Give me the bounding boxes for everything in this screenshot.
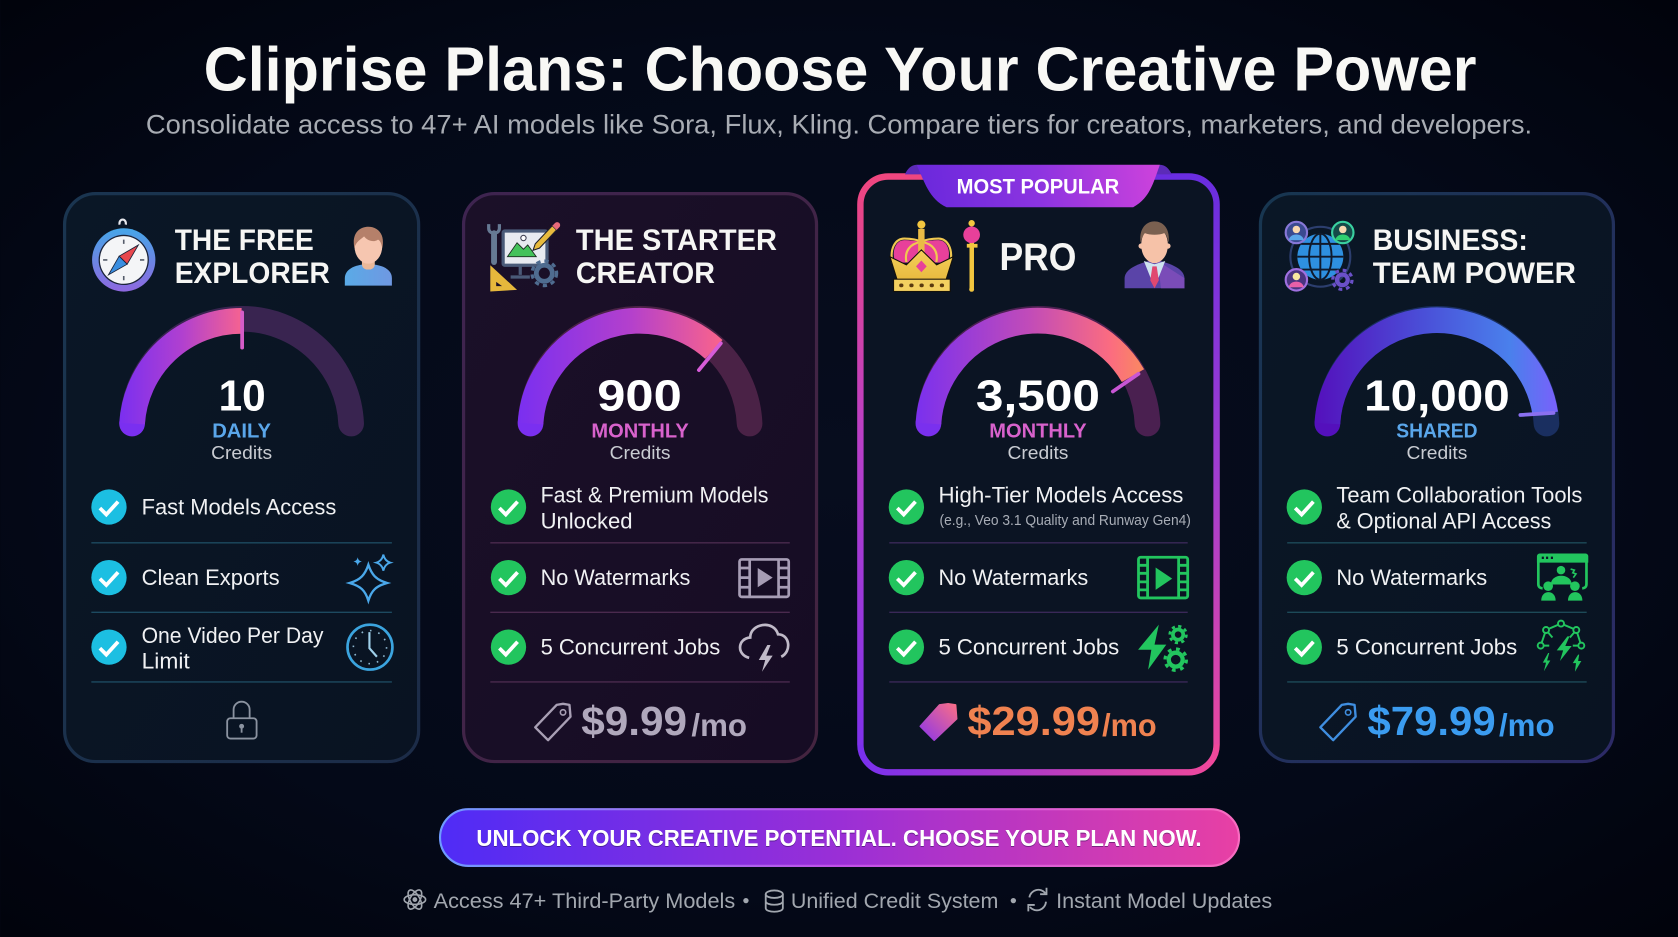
feature: no watermarks xyxy=(1287,560,1487,595)
feature: team collaboration: & Optional API Access xyxy=(1336,508,1551,533)
price: 79.99: /mo xyxy=(1499,708,1555,743)
gauge: 10 daily credits: Credits xyxy=(211,442,272,463)
feature: clean exports: Clean Exports xyxy=(142,565,280,590)
feature: concurrent jobs: 5 Concurrent Jobs xyxy=(938,635,1119,660)
plan name xyxy=(175,224,330,290)
price: 9.99: /mo xyxy=(691,708,747,743)
feature: concurrent jobs xyxy=(491,629,720,665)
feature: concurrent jobs: 5 Concurrent Jobs xyxy=(541,635,720,660)
title: Cliprise Plans: Choose Your Creative Power xyxy=(204,35,1477,104)
icon: green film strip xyxy=(1138,557,1188,598)
icon: sparkles xyxy=(350,555,390,601)
icon: lock xyxy=(227,702,257,739)
gauge: 900 monthly credits: 900 xyxy=(597,372,682,421)
call to action button: UNLOCK YOUR CREATIVE POTENTIAL. CHOOSE YOUR PLAN NOW. xyxy=(476,826,1202,852)
feature: high-tier models: High-Tier Models Access xyxy=(938,483,1183,508)
badge: most popular: MOST POPULAR xyxy=(957,176,1119,199)
icon: crown and scepter xyxy=(890,220,980,292)
feature: no watermarks xyxy=(491,560,690,595)
feature: one video per day limit xyxy=(91,623,323,674)
icon: database xyxy=(766,890,783,912)
badge: most popular xyxy=(905,165,1172,207)
plan name xyxy=(1373,224,1576,290)
panel: pro xyxy=(860,165,1217,772)
plan name xyxy=(576,224,777,290)
icon: film strip xyxy=(740,559,789,597)
panel: free explorer xyxy=(65,194,419,762)
gauge: 10 daily credits: 10 xyxy=(219,372,266,421)
icon: person in suit xyxy=(1125,221,1184,288)
panel: business xyxy=(1260,194,1613,762)
feature: no watermarks xyxy=(889,560,1088,595)
plan name: TEAM POWER xyxy=(1373,257,1576,290)
gauge: 900 monthly credits xyxy=(518,319,750,463)
panel: starter creator xyxy=(464,194,817,762)
call to action button: UNLOCK YOUR CREATIVE POTENTIAL. CHOOSE YOUR PLAN NOW. xyxy=(476,825,1202,851)
footer benefits: Instant Model Updates xyxy=(1056,889,1272,913)
icon: clock xyxy=(348,625,392,670)
feature: high-tier models xyxy=(889,483,1191,529)
price: 79.99: $79.99 xyxy=(1367,698,1496,744)
feature: fast and premium models: Fast & Premium Models xyxy=(541,483,768,508)
icon: price tag xyxy=(1320,704,1356,740)
gauge: 3500 monthly credits: Credits xyxy=(1007,442,1068,463)
gauge: 3500 monthly credits: 3,500 xyxy=(976,372,1100,421)
icon: filled price tag xyxy=(920,704,957,740)
icon: network bolts xyxy=(1538,621,1584,672)
icon: person xyxy=(345,227,392,286)
subtitle: Consolidate access to 47+ AI models like Sora, Flux, Kling. Compare tiers for creators, marketers, and developers. xyxy=(146,109,1532,140)
gauge: 10000 shared credits: Credits xyxy=(1406,442,1467,463)
gauge: 10000 shared credits: SHARED xyxy=(1396,420,1478,442)
feature: no watermarks: No Watermarks xyxy=(1336,565,1487,590)
icon: team window xyxy=(1537,554,1588,601)
feature: no watermarks: No Watermarks xyxy=(938,565,1088,590)
feature: concurrent jobs xyxy=(1287,629,1517,665)
price: 9.99: $9.99 xyxy=(581,698,687,744)
icon: refresh xyxy=(1028,888,1047,911)
icon: creator tools xyxy=(489,222,560,291)
icon: cloud with bolt xyxy=(740,625,788,672)
gauge: 10000 shared credits: 10,000 xyxy=(1364,372,1510,421)
gauge: 10 daily credits xyxy=(119,312,351,463)
gauge: 900 monthly credits: Credits xyxy=(610,442,671,463)
feature: fast and premium models xyxy=(491,483,768,533)
icon: compass xyxy=(92,220,155,292)
feature: concurrent jobs: 5 Concurrent Jobs xyxy=(1336,635,1517,660)
feature: clean exports xyxy=(91,560,280,595)
feature: team collaboration xyxy=(1287,483,1582,533)
gauge: 3500 monthly credits xyxy=(916,319,1147,463)
feature: concurrent jobs xyxy=(889,629,1119,665)
price: 29.99: /mo xyxy=(1102,708,1157,743)
price: 29.99 xyxy=(920,698,1157,744)
footer benefits xyxy=(404,888,1272,913)
price: 79.99 xyxy=(1320,698,1555,744)
plan name: BUSINESS: xyxy=(1373,224,1528,257)
feature: no watermarks: No Watermarks xyxy=(541,565,690,590)
feature: one video per day limit: One Video Per Day xyxy=(142,623,323,648)
gauge: 3500 monthly credits: MONTHLY xyxy=(989,420,1087,442)
feature: fast models access: Fast Models Access xyxy=(142,494,336,519)
feature: fast and premium models: Unlocked xyxy=(541,508,633,533)
plan name: CREATOR xyxy=(576,257,715,290)
call to action button xyxy=(440,809,1239,866)
feature: team collaboration: Team Collaboration Tools xyxy=(1336,483,1582,508)
price: 9.99 xyxy=(535,698,747,744)
footer benefits: Unified Credit System xyxy=(791,889,998,913)
feature: one video per day limit: Limit xyxy=(142,649,190,674)
footer benefits: Access 47+ Third-Party Models xyxy=(434,889,735,913)
plan name: PRO xyxy=(999,236,1076,279)
gauge: 10000 shared credits xyxy=(1315,319,1554,463)
feature: high-tier models: (e.g., Veo 3.1 Quality and Runway Gen4) xyxy=(940,513,1191,529)
icon: globe team xyxy=(1286,222,1353,291)
plan name: EXPLORER xyxy=(175,257,330,290)
icon: price tag xyxy=(535,704,571,740)
plan name: THE STARTER xyxy=(576,224,777,257)
plan name: THE FREE xyxy=(175,224,314,257)
gauge: 900 monthly credits: MONTHLY xyxy=(591,420,689,442)
icon: bolt and gears xyxy=(1138,625,1186,670)
gauge: 10 daily credits: DAILY xyxy=(212,420,271,442)
icon: atom xyxy=(404,888,426,911)
price: 29.99: $29.99 xyxy=(967,698,1100,744)
feature: fast models access xyxy=(91,489,336,525)
